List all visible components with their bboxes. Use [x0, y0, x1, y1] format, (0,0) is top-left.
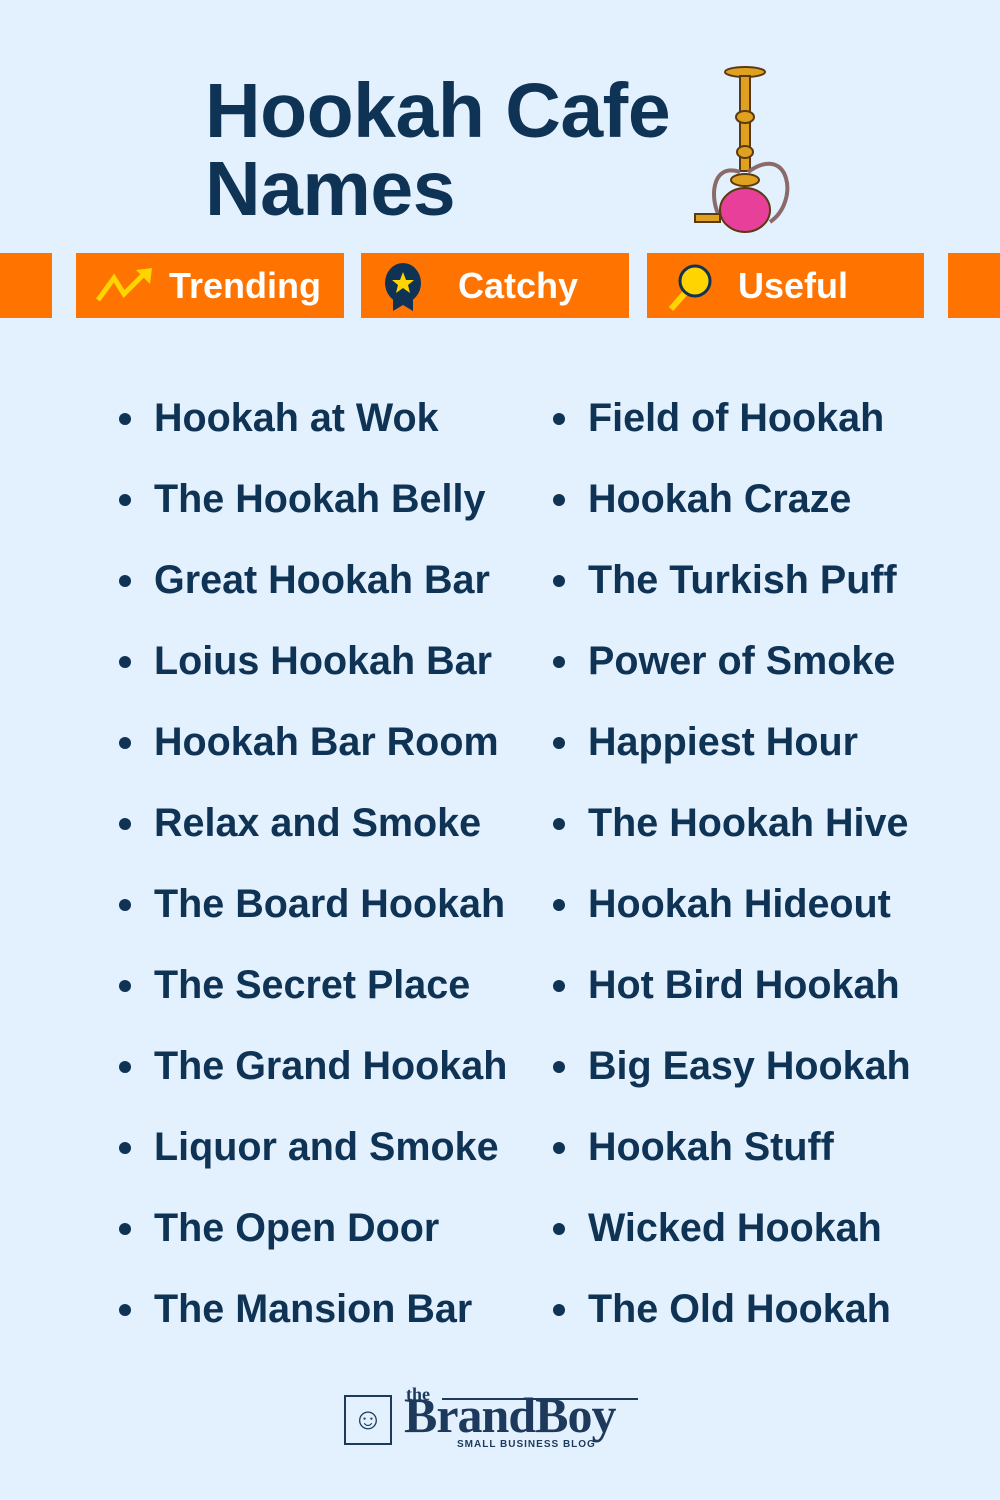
tab: catchy: [361, 253, 629, 318]
list: right column: Hookah Stuff: [588, 1125, 834, 1169]
tab: right edge: [948, 253, 1000, 318]
logo: BrandBoy: [404, 1387, 616, 1443]
list: right column: Big Easy Hookah: [588, 1044, 911, 1088]
list: right column: Happiest Hour: [588, 720, 858, 764]
list: left column: Great Hookah Bar: [154, 558, 490, 602]
list: left column: [119, 396, 507, 1331]
list: right column: Wicked Hookah: [588, 1206, 882, 1250]
list: left column: The Grand Hookah: [154, 1044, 507, 1088]
icon: badge: [385, 263, 421, 311]
logo icon: ☺: [353, 1403, 383, 1436]
tab: left edge: [0, 253, 52, 318]
list: left column: The Hookah Belly: [154, 477, 485, 521]
list: right column: Field of Hookah: [588, 396, 884, 440]
list: right column: [553, 396, 911, 1331]
list: left column: Loius Hookah Bar: [154, 639, 492, 683]
list: left column: The Secret Place: [154, 963, 470, 1007]
list: left column: The Mansion Bar: [154, 1287, 472, 1331]
list: right column: Power of Smoke: [588, 639, 895, 683]
icon: hookah: [694, 66, 790, 233]
tab: catchy: Catchy: [458, 265, 578, 306]
list: right column: The Hookah Hive: [588, 801, 908, 845]
title: Names: [205, 146, 455, 232]
tab: useful: [647, 253, 924, 318]
logo text: [404, 1384, 638, 1450]
title: Hookah Cafe: [205, 68, 670, 154]
list: right column: Hot Bird Hookah: [588, 963, 900, 1007]
list: left column: Relax and Smoke: [154, 801, 481, 845]
list: left column: Hookah Bar Room: [154, 720, 499, 764]
tab: useful: Useful: [738, 265, 848, 306]
list: right column: Hookah Craze: [588, 477, 851, 521]
icon: magnifier: [668, 264, 712, 311]
logo: [344, 1384, 638, 1450]
list: right column: Hookah Hideout: [588, 882, 891, 926]
icon: trend arrow: [96, 268, 152, 302]
list: right column: The Old Hookah: [588, 1287, 891, 1331]
list: left column: The Open Door: [154, 1206, 439, 1250]
logo: SMALL BUSINESS BLOG: [457, 1439, 596, 1450]
logo: the: [406, 1384, 430, 1404]
list: right column: The Turkish Puff: [588, 558, 897, 602]
logo icon: [344, 1395, 392, 1445]
title: [205, 68, 670, 232]
tab: trending: [76, 253, 344, 318]
list: left column: Liquor and Smoke: [154, 1125, 499, 1169]
list: left column: Hookah at Wok: [154, 396, 439, 440]
list: left column: The Board Hookah: [154, 882, 505, 926]
tab: trending: Trending: [169, 265, 321, 306]
